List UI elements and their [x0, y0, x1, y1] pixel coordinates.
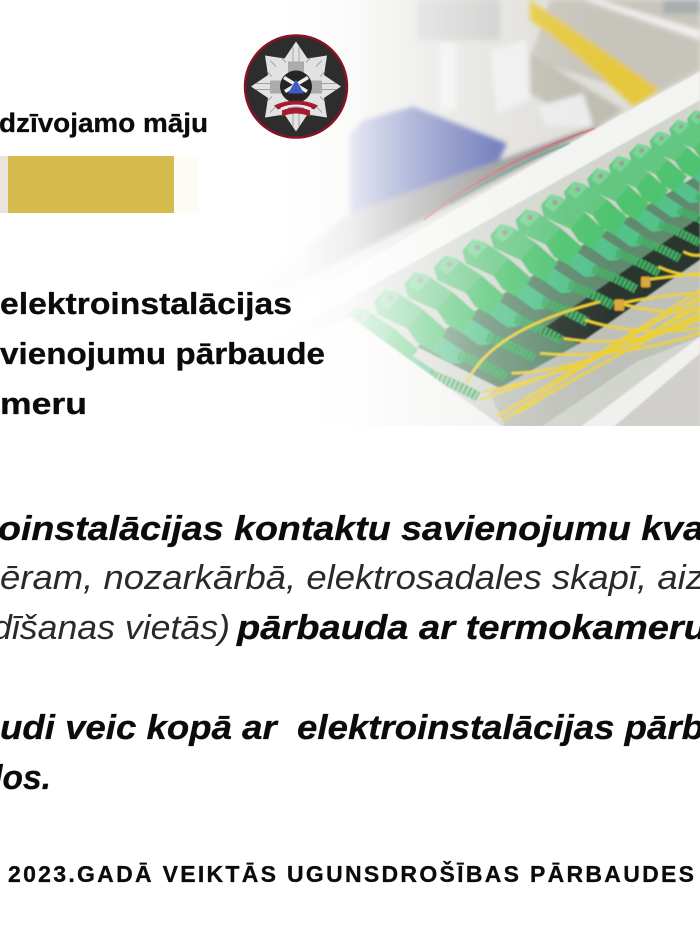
body paragraph 1: pārbauda ar termokameru — [236, 609, 700, 647]
body paragraph 1 — [0, 510, 700, 647]
logo: fire service badge — [245, 36, 347, 138]
footer caption: 2023.GADĀ VEIKTĀS UGUNSDROŠĪBAS PĀRBAUDES — [8, 860, 694, 887]
body paragraph 1: oinstalācijas kontaktu savienojumu kva — [0, 510, 700, 548]
connectors — [686, 110, 700, 132]
title: meru — [0, 386, 87, 421]
gold bar — [0, 156, 199, 213]
white fade overlay — [200, 0, 578, 426]
photo: fibre optic patch panel — [248, 0, 700, 426]
title: elektroinstalācijas — [0, 286, 292, 321]
yellow fibres — [467, 252, 700, 420]
body paragraph 2: udi veic kopā ar elektroinstalācijas pārb — [0, 709, 700, 747]
body paragraph 1: ēram, nozarkārbā, elektrosadales skapī, aiz — [0, 559, 700, 597]
eight-point star — [251, 42, 341, 132]
heading: house type: dzīvojamo māju — [0, 108, 208, 138]
panel face — [440, 101, 700, 426]
top white rail — [396, 72, 700, 270]
body paragraph 2 — [0, 709, 700, 797]
title — [0, 286, 325, 421]
blurred background equipment — [332, 0, 700, 260]
bottom white frame — [200, 317, 507, 430]
shadow and dark cavity under connectors — [417, 173, 700, 393]
title: vienojumu pārbaude — [0, 336, 325, 371]
